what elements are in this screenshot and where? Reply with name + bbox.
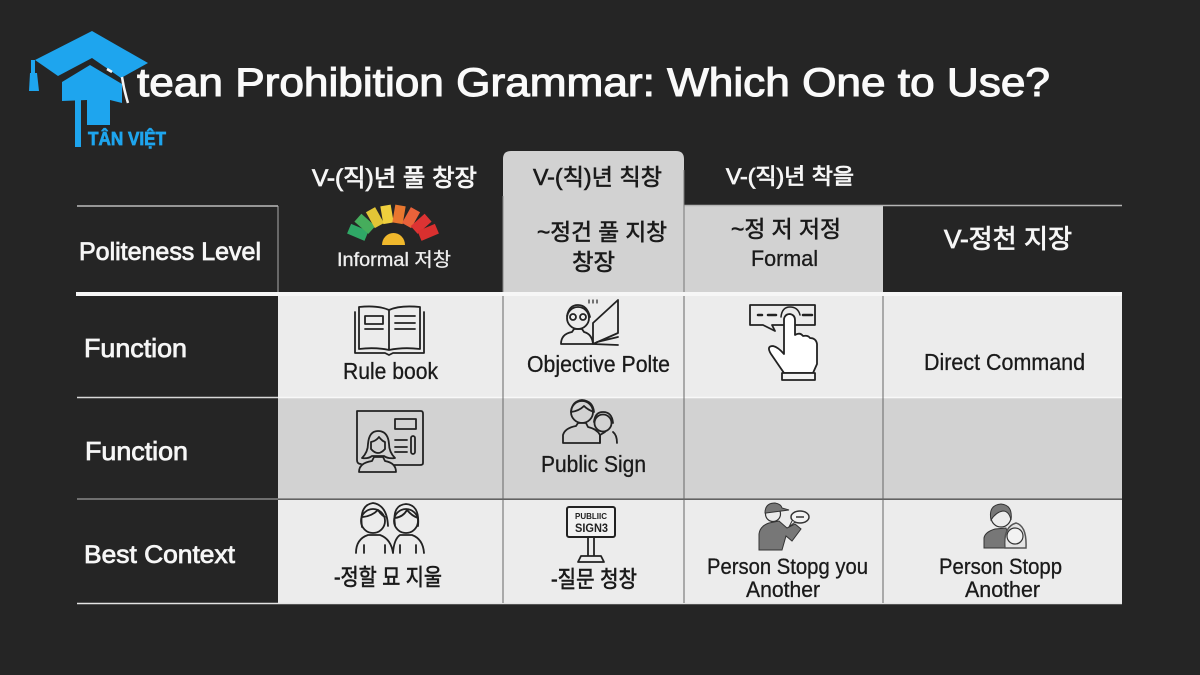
text: context 2: -질문 청창 — [551, 566, 637, 592]
formal header text: ~정 저 저정 — [731, 216, 841, 242]
text: context 4: Person Stopp — [939, 554, 1062, 579]
highlighted header text — [537, 219, 667, 275]
icon: hand tapping speech box — [750, 305, 817, 380]
icon: rule book — [355, 306, 424, 355]
icon: objective person with open book — [561, 300, 618, 345]
formal header text — [731, 216, 841, 271]
text: context 4 — [939, 554, 1062, 602]
logo: Tân Việt graduation cap: TÂN VIỆT — [88, 128, 166, 149]
panel: function row two — [278, 398, 1122, 499]
dark header text: V-정천 지장 — [944, 224, 1072, 254]
text: objective polite: Objective Polte — [527, 351, 670, 377]
row label: function: Function — [84, 333, 187, 363]
text: direct command: Direct Command — [924, 349, 1085, 375]
icon: teacher at board — [357, 411, 423, 472]
row label: function second: Function — [85, 436, 188, 466]
icon: public sign board — [567, 507, 615, 562]
icon: person stopping with speech bubble — [759, 503, 809, 550]
highlighted header text: ~정건 풀 지창 — [537, 219, 667, 245]
row label: best context: Best Context — [84, 541, 235, 569]
icon: public sign board: PUBLIIC — [575, 511, 607, 521]
informal label: Informal 저창 — [337, 249, 451, 271]
text: rule book: Rule book — [343, 358, 438, 384]
icon: parent and child — [984, 504, 1026, 548]
icon: two people public — [563, 400, 617, 443]
row label: politeness level: Politeness Level — [79, 238, 261, 266]
text: context 3: Another — [746, 577, 820, 602]
text: public sign: Public Sign — [541, 451, 646, 477]
text: context 4: Another — [965, 577, 1040, 602]
icon: two friends — [356, 503, 424, 553]
panel: function row one — [278, 296, 1122, 397]
panel: best context row — [278, 500, 1122, 603]
icon: public sign board: SIGN3 — [575, 523, 608, 535]
panel: formal header cell — [684, 206, 883, 292]
column header 3: V-(직)년 착을 — [726, 164, 854, 189]
title: tean Prohibition Grammar: Which One to Use? — [137, 61, 1050, 105]
politeness gauge icon — [349, 206, 437, 245]
column header 2: V-(칙)년 칙창 — [533, 164, 662, 190]
column header 1: V-(직)년 풀 창장 — [312, 165, 477, 192]
text: context 1: -정할 묘 지울 — [334, 564, 442, 590]
text: context 3 — [707, 554, 868, 602]
formal header text: Formal — [751, 246, 818, 271]
logo: Tân Việt graduation cap — [29, 31, 166, 149]
text: context 3: Person Stopg you — [707, 554, 868, 579]
panel: highlighted column tab — [503, 151, 684, 292]
highlighted header text: 창장 — [572, 249, 615, 275]
